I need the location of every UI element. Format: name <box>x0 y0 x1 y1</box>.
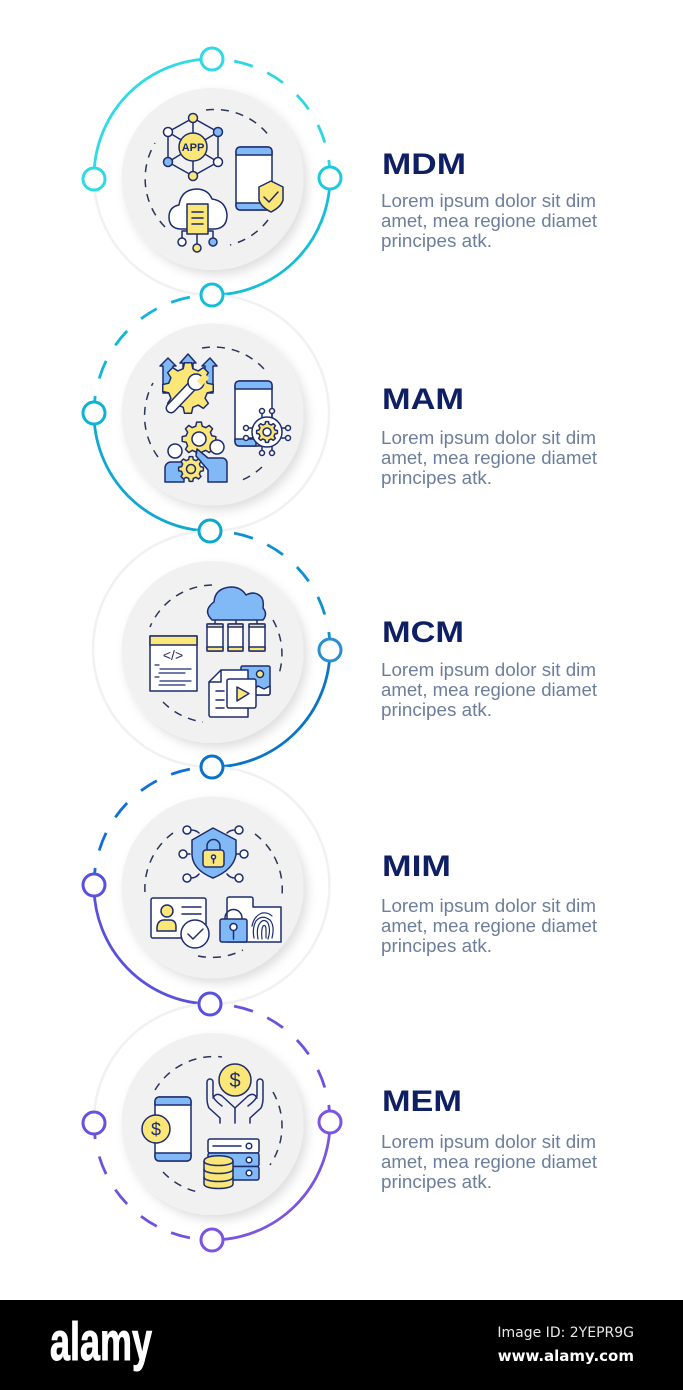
icon: code window <box>150 636 197 691</box>
text block: MCM description <box>381 660 597 720</box>
icon: app network <box>164 114 222 180</box>
text block: MEM description <box>381 1132 597 1192</box>
text block: MIM description: amet, mea regione diamet <box>381 916 597 936</box>
footer: stock image bar: Image ID: 2YEPR9G <box>497 1325 634 1341</box>
text block: MEM description: amet, mea regione diamet <box>381 1152 597 1172</box>
icon: gear with arrows and wrench <box>160 354 217 413</box>
heading: MEM: MEM <box>382 1085 462 1118</box>
text block: MAM description: amet, mea regione diamet <box>381 448 597 468</box>
icon: cloud document <box>169 189 227 252</box>
footer: stock image bar: www.alamy.com <box>498 1347 634 1365</box>
text block: MCM description: Lorem ipsum dolor sit dim <box>381 660 596 680</box>
text block: MAM description: Lorem ipsum dolor sit dim <box>381 428 596 448</box>
text block: MIM description <box>381 896 597 956</box>
icon: phone with gear circuit <box>235 381 290 456</box>
panel: MAM ring <box>83 284 329 531</box>
text block: MDM description: Lorem ipsum dolor sit dim <box>381 191 596 211</box>
icon: media files <box>209 666 270 717</box>
heading: MDM: MDM <box>382 148 466 181</box>
panel: MCM ring <box>93 520 341 767</box>
text block: MAM description: principes atk. <box>381 468 492 488</box>
icon: hands holding coin: $ <box>229 1070 241 1092</box>
icon: code window: </> <box>163 647 183 663</box>
icon: hands holding coin <box>207 1064 263 1123</box>
icon: app network: APP <box>182 142 204 154</box>
icon: phone with dollar coin <box>142 1097 191 1161</box>
text block: MAM description <box>381 428 597 488</box>
icon: shield with lock and nodes <box>179 826 248 882</box>
icon: folder with lock and fingerprint <box>220 897 281 942</box>
text block: MCM description: amet, mea regione diamet <box>381 680 597 700</box>
panel: MEM ring <box>83 993 341 1251</box>
text block: MDM description <box>381 191 597 251</box>
text block: MEM description: principes atk. <box>381 1172 492 1192</box>
panel: MDM ring <box>83 48 341 295</box>
heading: MIM: MIM <box>382 850 451 883</box>
text block: MIM description: Lorem ipsum dolor sit dim <box>381 896 596 916</box>
text block: MEM description: Lorem ipsum dolor sit dim <box>381 1132 596 1152</box>
text block: MIM description: principes atk. <box>381 936 492 956</box>
icon: ID card with check <box>151 898 209 948</box>
text block: MDM description: principes atk. <box>381 231 492 251</box>
footer: stock image bar: alamy <box>50 1312 152 1372</box>
icon: cloud with devices <box>207 587 266 651</box>
footer: stock image bar <box>0 1300 683 1390</box>
icon: phone with shield <box>236 147 283 212</box>
icon: phone with dollar coin: $ <box>151 1120 161 1140</box>
heading: MAM: MAM <box>382 383 464 416</box>
heading: MCM: MCM <box>382 616 464 649</box>
panel: MIM ring <box>83 756 329 1004</box>
icon: team with gears <box>165 422 227 482</box>
text block: MCM description: principes atk. <box>381 700 492 720</box>
icon: server and database <box>204 1139 259 1188</box>
text block: MDM description: amet, mea regione diamet <box>381 211 597 231</box>
